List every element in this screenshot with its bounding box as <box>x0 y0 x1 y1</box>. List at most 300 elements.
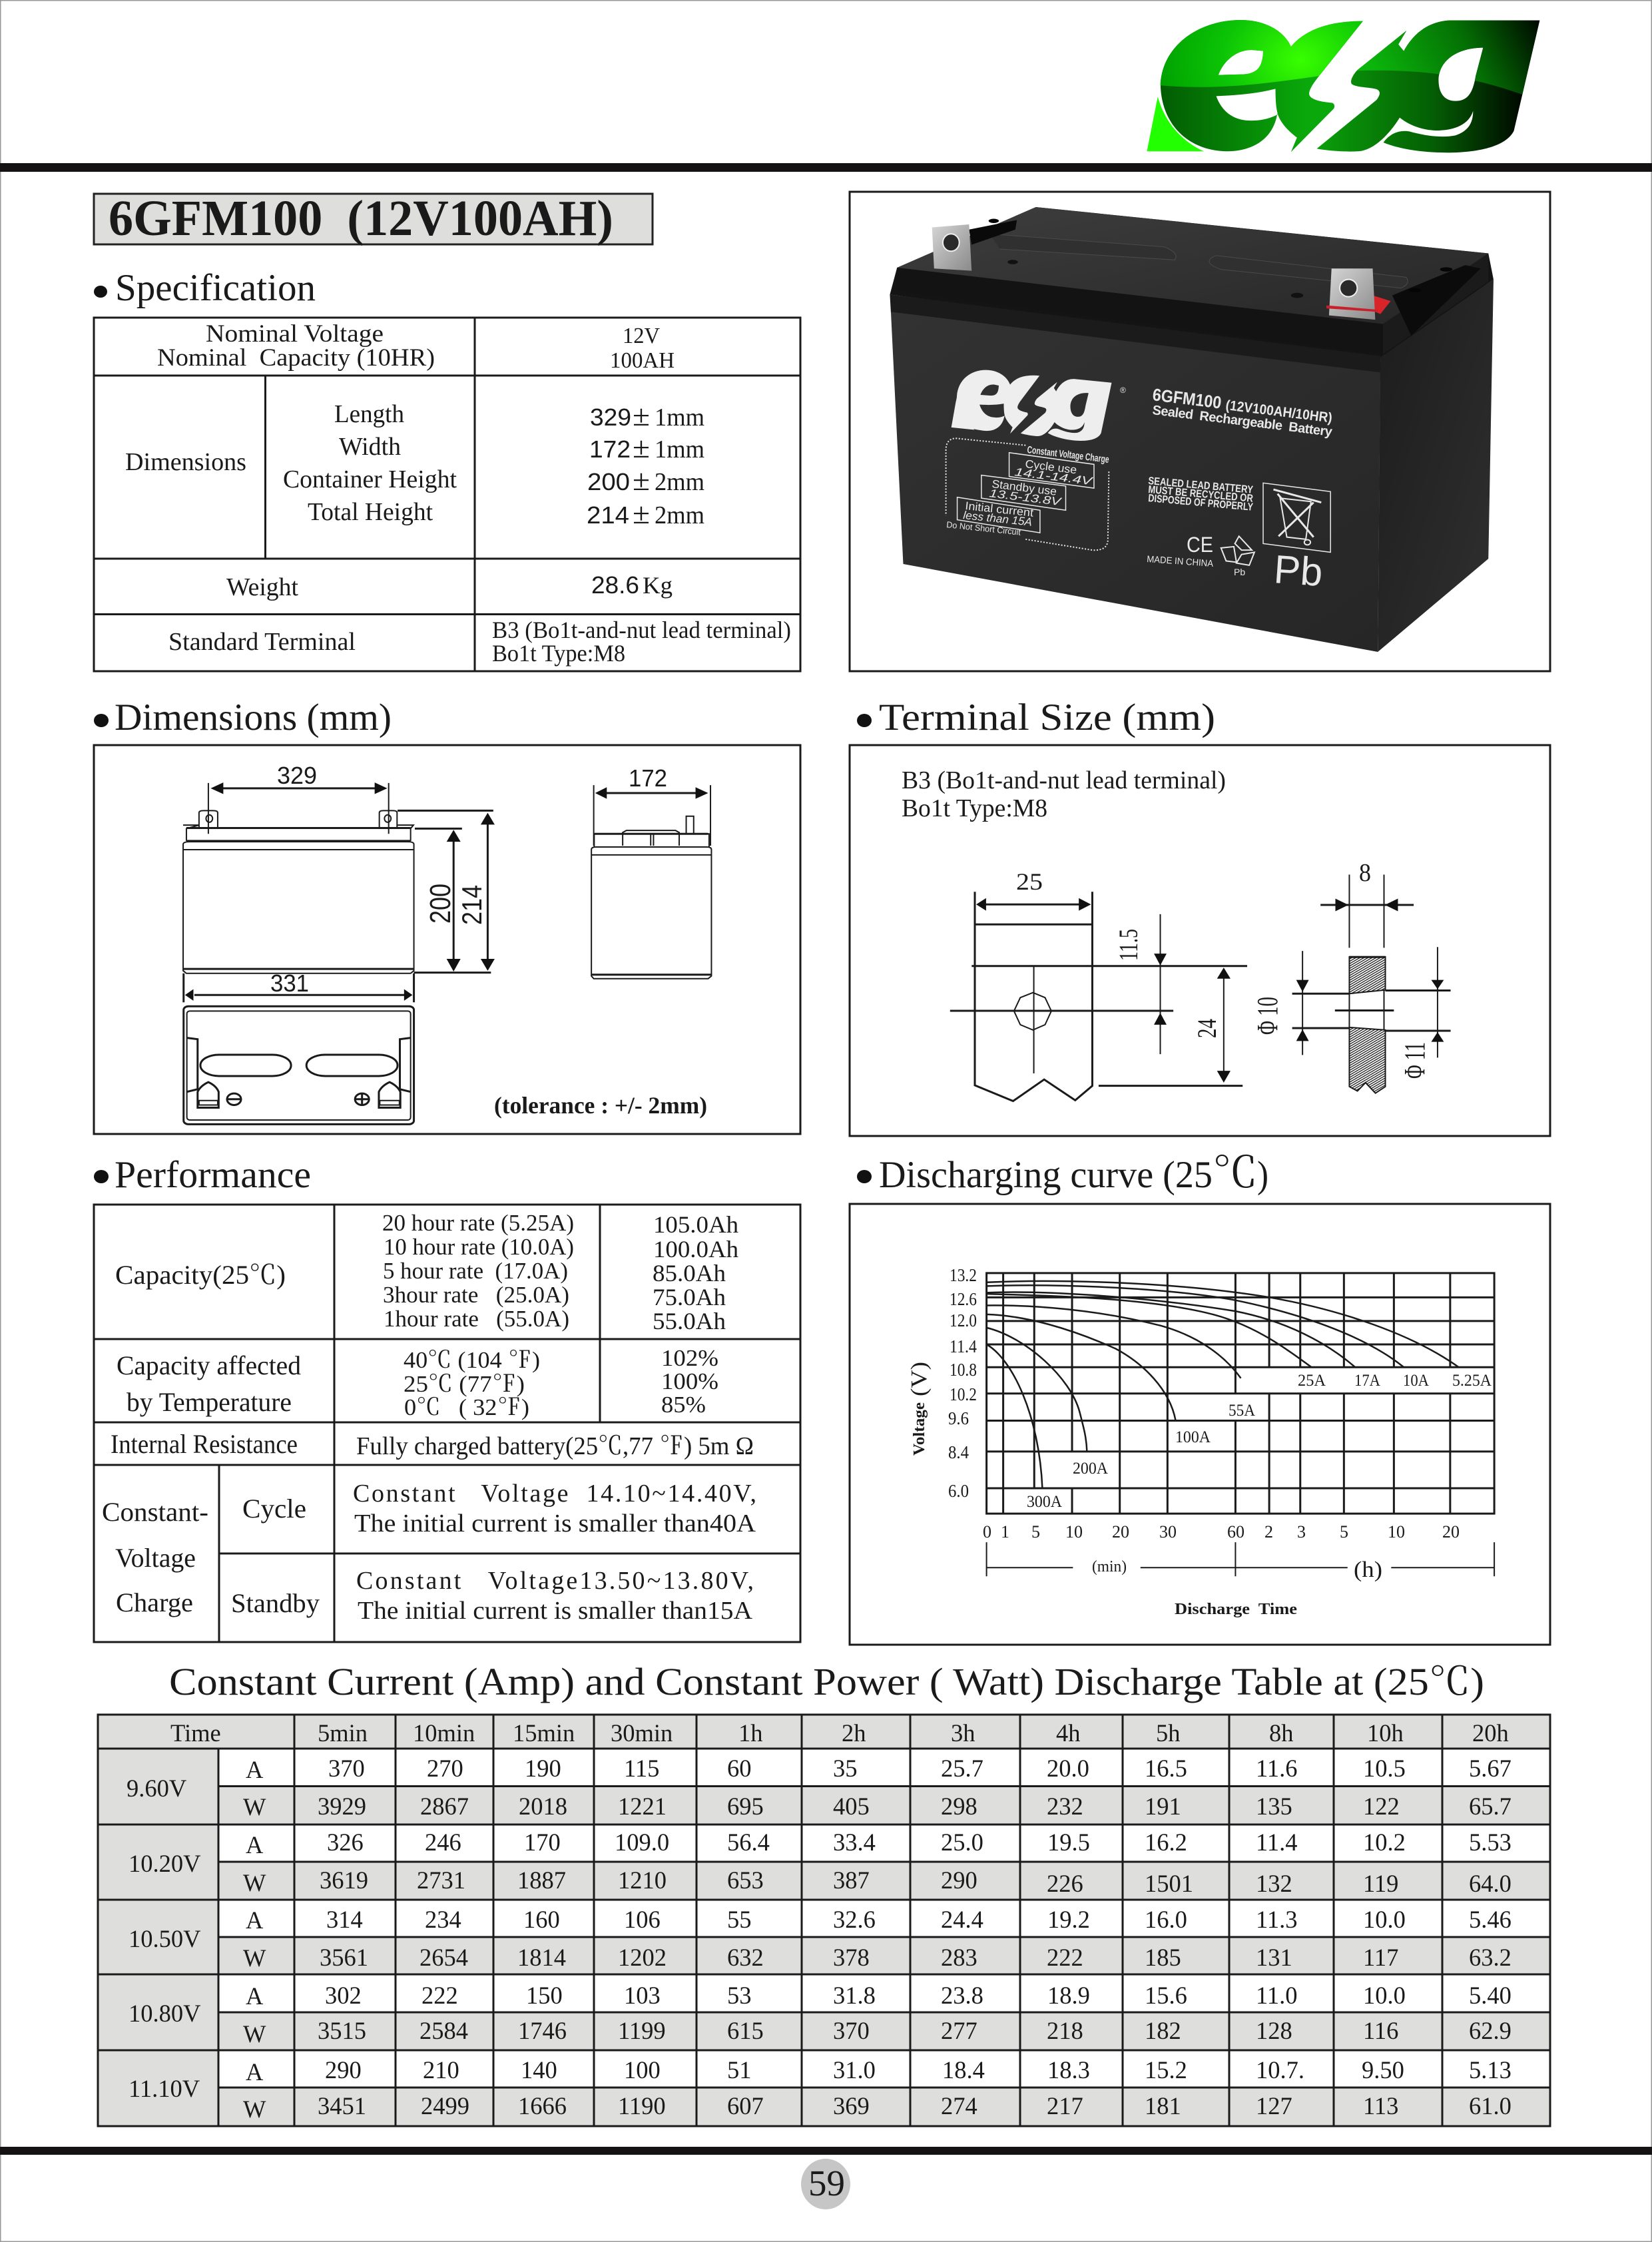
battery labels: DISPOSED OF PROPERLY <box>1148 493 1254 513</box>
panel: specification table: Total Height <box>308 498 433 526</box>
logo: esg <box>1147 20 1539 152</box>
row: 10.20V W: W <box>243 1869 266 1896</box>
page number: 59 <box>808 2163 845 2203</box>
row: 9.60V W: 695 <box>727 1793 764 1820</box>
x-axis scale <box>983 1522 1460 1541</box>
internal resistance row <box>111 1429 754 1460</box>
heading: Specification: Specification <box>115 267 316 309</box>
row: 10.20V A: 170 <box>524 1828 561 1856</box>
curve labels: 200A <box>1073 1460 1108 1478</box>
x-axis scale: 2 <box>1264 1522 1273 1541</box>
row: 10.20V W <box>243 1866 1512 1897</box>
temperature rows: 85% <box>661 1392 706 1418</box>
panel: specification table: Length <box>334 400 404 428</box>
row: 11.10V W: 181 <box>1145 2092 1181 2119</box>
battery labels: 13.5-13.8V <box>989 487 1063 508</box>
row: 10.20V A: 11.4 <box>1256 1828 1298 1856</box>
curve labels: 25A <box>1298 1372 1326 1390</box>
row: 10.80V W: 128 <box>1256 2017 1292 2044</box>
row: 11.10V W: 2499 <box>421 2092 469 2119</box>
row: 10.80V W: W <box>243 2020 266 2048</box>
row: 10.80V A: 11.0 <box>1256 1982 1298 2009</box>
panel: specification table: 329 <box>590 404 631 431</box>
row: 9.60V A: 16.5 <box>1145 1755 1187 1782</box>
row: 10.80V A: 31.8 <box>833 1982 876 2009</box>
row: 11.10V W: 607 <box>727 2092 764 2119</box>
row: 11.10V W: 1666 <box>518 2092 567 2119</box>
row: 10.80V A: 103 <box>624 1982 661 2009</box>
heading: Discharging curve: Discharging curve (25 <box>879 1154 1213 1196</box>
battery labels: Pb <box>1272 547 1324 595</box>
constant-voltage charge rows: Constant Voltage13.50~13.80V, <box>356 1567 754 1595</box>
panel: battery photo <box>850 192 1550 671</box>
table header row: 15min <box>513 1719 575 1747</box>
row: 10.50V A: 5.46 <box>1469 1906 1512 1933</box>
table header row: 20h <box>1472 1719 1509 1747</box>
internal resistance row: Fully charged battery(25℃,77 ℉) 5m Ω <box>356 1432 754 1460</box>
x-axis scale: 30 <box>1159 1522 1177 1541</box>
row: 9.60V A: 10.5 <box>1363 1755 1406 1782</box>
row: 9.60V W: W <box>243 1793 266 1821</box>
voltage labels: 11.10V <box>129 2075 200 2102</box>
capacity rows: Capacity(25℃) <box>115 1260 286 1290</box>
row: 10.80V A: 150 <box>526 1982 563 2009</box>
footer bar <box>0 2147 1652 2155</box>
drawing: terminal section <box>1292 875 1451 1093</box>
row: 9.60V A <box>246 1755 1512 1783</box>
dotted charge box <box>946 438 1109 550</box>
panel: specification table: Kg <box>643 572 673 599</box>
dimension labels: 172 <box>629 764 667 792</box>
row: 11.10V A: 210 <box>423 2056 459 2084</box>
row: 11.10V A <box>246 2056 1512 2086</box>
heading: Terminal Size: Terminal Size (mm) <box>879 697 1215 738</box>
x-axis scale: 1 <box>1001 1522 1009 1541</box>
table: constant current and power discharge <box>98 1715 1550 2126</box>
tolerance note: (tolerance : +/- 2mm) <box>494 1092 707 1119</box>
panel: specification table: 12V <box>623 324 660 348</box>
row: 10.80V W: 116 <box>1363 2017 1398 2044</box>
row: 10.50V A: 24.4 <box>941 1906 983 1933</box>
table header row <box>170 1719 1509 1747</box>
heading: Discharging curve: ℃ <box>1213 1149 1258 1197</box>
row: 10.20V W: 3619 <box>320 1866 368 1894</box>
temperature rows: by Temperature <box>127 1387 292 1417</box>
y-axis scale: 9.6 <box>948 1408 969 1428</box>
row: 10.50V A: 11.3 <box>1256 1906 1298 1933</box>
table header row: 2h <box>842 1719 866 1747</box>
x-axis units and title <box>1092 1557 1382 1618</box>
curve labels: 5.25A <box>1452 1372 1492 1390</box>
row: 10.80V A: 18.9 <box>1047 1982 1090 2009</box>
row: 9.60V W: 3929 <box>318 1793 366 1820</box>
panel: specification table: 1mm <box>655 404 704 431</box>
panel: specification table: 2mm <box>655 501 704 529</box>
header bar <box>0 163 1652 172</box>
table header row: 10min <box>413 1719 475 1747</box>
panel: specification table: Standard Terminal <box>168 628 356 656</box>
row: 11.10V A: 100 <box>624 2056 661 2084</box>
capacity rows <box>115 1210 738 1334</box>
row: 9.60V A: 270 <box>427 1755 463 1782</box>
row: 10.20V W: 290 <box>941 1866 977 1894</box>
row: 10.80V A <box>246 1982 1512 2010</box>
drawing: side view <box>591 785 711 979</box>
row: 10.80V W: 2584 <box>419 2017 468 2044</box>
row: 9.60V A: 20.0 <box>1047 1755 1089 1782</box>
drawing: terminal front <box>950 892 1247 1101</box>
row: 11.10V A: 5.13 <box>1469 2056 1512 2084</box>
row: 10.80V W: 182 <box>1145 2017 1181 2044</box>
row: 10.20V W: 2731 <box>417 1866 465 1894</box>
temperature rows <box>117 1345 718 1420</box>
x-axis scale: 3 <box>1297 1522 1306 1541</box>
battery labels: Initial current <box>965 499 1034 519</box>
row: 10.20V A: A <box>246 1831 264 1858</box>
battery labels: ® <box>1120 386 1126 395</box>
row: 10.20V A: 10.2 <box>1363 1828 1406 1856</box>
battery labels: Do Not Short Circuit <box>946 519 1021 537</box>
row: 11.10V A: 15.2 <box>1145 2056 1187 2084</box>
row: 10.50V W: 1814 <box>517 1944 566 1971</box>
terminal dimension labels: 25 <box>1016 868 1043 895</box>
y-axis scale: 8.4 <box>948 1442 969 1462</box>
panel: specification table: Width <box>339 433 401 461</box>
row: 9.60V W: 2018 <box>519 1793 567 1820</box>
mini logo on battery <box>952 366 1111 444</box>
row: 10.20V A: 326 <box>327 1828 364 1856</box>
row: 10.50V W <box>243 1944 1512 1972</box>
row: 10.50V A: 10.0 <box>1363 1906 1406 1933</box>
row: 11.10V A: 31.0 <box>833 2056 876 2084</box>
row: 9.60V A: 370 <box>328 1755 365 1782</box>
table header row: Time <box>170 1719 221 1747</box>
row: 10.80V W: 3515 <box>318 2017 366 2044</box>
battery labels: 6GFM100 <box>1151 384 1223 413</box>
x-axis scale: 20 <box>1112 1522 1129 1541</box>
row: 9.60V W: 298 <box>941 1793 977 1820</box>
row: 9.60V W: 191 <box>1145 1793 1181 1820</box>
row: 10.50V A: 106 <box>624 1906 661 1933</box>
capacity rows: 3hour rate (25.0A) <box>383 1282 569 1308</box>
panel: specification table: Nominal Capacity (10HR) <box>157 344 435 372</box>
voltage labels: 10.20V <box>129 1850 200 1877</box>
row: 10.80V A: 53 <box>727 1982 751 2009</box>
panel: terminal size drawing <box>850 745 1550 1136</box>
panel: specification table: Nominal Voltage <box>206 320 384 348</box>
row: 10.20V W: 1501 <box>1145 1870 1193 1897</box>
capacity rows: 100.0Ah <box>653 1236 738 1262</box>
row: 10.80V A: 10.0 <box>1363 1982 1406 2009</box>
capacity rows: 55.0Ah <box>653 1308 726 1334</box>
row: 10.20V W: 226 <box>1047 1870 1083 1897</box>
curve labels: 55A <box>1229 1402 1255 1420</box>
voltage labels: 10.50V <box>129 1925 200 1952</box>
constant-voltage charge rows: Constant Voltage 14.10~14.40V, <box>353 1480 756 1508</box>
row: 9.60V A: A <box>246 1756 264 1783</box>
curve labels: 300A <box>1027 1493 1062 1511</box>
dimension labels: 200 <box>424 884 457 924</box>
battery labels: Cycle use <box>1025 457 1077 476</box>
battery labels <box>946 384 1334 595</box>
panel: specification table: ± <box>633 431 650 464</box>
table header row: 4h <box>1056 1719 1080 1747</box>
table header row: 30min <box>611 1719 673 1747</box>
battery labels: (12V100AH/10HR) <box>1225 398 1333 426</box>
row: 9.60V W <box>243 1793 1512 1821</box>
battery body <box>890 207 1494 652</box>
internal resistance row: Internal Resistance <box>111 1429 298 1459</box>
row: 10.20V W: 64.0 <box>1469 1870 1512 1897</box>
terminal dimension labels: 8 <box>1359 859 1371 887</box>
row: 10.50V W: W <box>243 1944 266 1972</box>
capacity rows: 20 hour rate (5.25A) <box>382 1210 574 1236</box>
row: 11.10V A: 140 <box>521 2056 557 2084</box>
battery labels: less than 15A <box>963 509 1033 529</box>
row: 9.60V W: 2867 <box>420 1793 469 1820</box>
constant-voltage charge rows: The initial current is smaller than40A <box>354 1510 756 1538</box>
row: 11.10V A: 290 <box>325 2056 362 2084</box>
recycling bin icon <box>1263 483 1330 552</box>
row: 10.50V W: 117 <box>1363 1944 1398 1971</box>
temperature rows: 100% <box>661 1368 718 1394</box>
row: 9.60V A: 115 <box>624 1755 659 1782</box>
curve labels: 17A <box>1354 1372 1380 1390</box>
terminal dimension labels: 24 <box>1192 1019 1222 1038</box>
row: 10.50V W: 3561 <box>320 1944 368 1971</box>
battery labels: MADE IN CHINA <box>1147 553 1214 569</box>
row: 10.50V A: 234 <box>425 1906 461 1933</box>
battery labels: SEALED LEAD BATTERY <box>1148 475 1254 496</box>
row: 10.20V W: 1887 <box>517 1866 566 1894</box>
row: 9.60V A: 190 <box>525 1755 561 1782</box>
x-axis scale: 60 <box>1227 1522 1244 1541</box>
table header row: 1h <box>738 1719 763 1747</box>
row: 10.50V A: 19.2 <box>1047 1906 1090 1933</box>
row: 10.50V A: 55 <box>727 1906 751 1933</box>
drawing: front view <box>183 782 708 1002</box>
row: 10.20V A: 5.53 <box>1469 1828 1512 1856</box>
row: 10.20V A: 56.4 <box>727 1828 770 1856</box>
capacity rows: 5 hour rate (17.0A) <box>383 1258 568 1284</box>
curve labels: 100A <box>1175 1428 1211 1446</box>
chart grid and curves <box>987 1273 1494 1576</box>
battery labels: MUST BE RECYCLED OR <box>1148 484 1254 505</box>
voltage labels <box>127 1775 200 2102</box>
row: 11.10V W: W <box>243 2096 266 2123</box>
x-axis scale: 10 <box>1065 1522 1083 1541</box>
panel: specification table: ± <box>633 400 650 432</box>
table header row: 3h <box>951 1719 975 1747</box>
row: 11.10V A: 10.7. <box>1256 2056 1304 2084</box>
panel: terminal size drawing: B3 (Bo1t-and-nut lead terminal) <box>902 766 1226 794</box>
row: 10.50V A: A <box>246 1906 264 1934</box>
terminal dimension labels: Φ 10 <box>1251 997 1284 1035</box>
row: 10.80V A: 15.6 <box>1145 1982 1187 2009</box>
y-axis scale: 10.8 <box>950 1360 977 1380</box>
row: 11.10V A: 18.4 <box>942 2056 985 2084</box>
row: 10.50V A: 32.6 <box>833 1906 876 1933</box>
panel: discharging curve chart <box>850 1204 1550 1645</box>
voltage labels: 9.60V <box>127 1775 186 1802</box>
row: 10.20V A: 16.2 <box>1145 1828 1187 1856</box>
row: 10.80V A: 302 <box>325 1982 362 2009</box>
row: 9.60V A: 25.7 <box>941 1755 983 1782</box>
row: 11.10V A: 51 <box>727 2056 751 2084</box>
dimension labels: 329 <box>277 762 317 789</box>
row: 10.50V W: 283 <box>941 1944 977 1971</box>
x-axis scale: 10 <box>1388 1522 1405 1541</box>
panel: specification table: 1mm <box>655 435 704 463</box>
row: 10.20V W: 653 <box>727 1866 764 1894</box>
battery labels: Sealed Rechargeable Battery <box>1151 403 1334 439</box>
row: 11.10V W: 127 <box>1256 2092 1292 2119</box>
battery labels: Constant Voltage Charge <box>1027 444 1110 465</box>
curve labels: 10A <box>1403 1372 1429 1390</box>
row: 9.60V W: 65.7 <box>1469 1793 1512 1820</box>
y-axis title <box>907 1362 932 1456</box>
x-axis units and title: (min) <box>1092 1558 1127 1575</box>
row: 11.10V W: 61.0 <box>1469 2092 1512 2119</box>
drawing: top view <box>184 1006 414 1124</box>
panel: specification table: Container Height <box>283 465 457 493</box>
row: 10.50V W: 632 <box>727 1944 764 1971</box>
constant-voltage charge rows: The initial current is smaller than15A <box>358 1597 753 1625</box>
battery labels: Pb <box>1234 567 1245 577</box>
panel: specification table: 28.6 <box>591 571 639 599</box>
row: 11.10V W: 3451 <box>318 2092 366 2119</box>
row: 10.80V W: 615 <box>727 2017 764 2044</box>
row: 9.60V A: 60 <box>727 1755 751 1782</box>
row: 10.80V A: 5.40 <box>1469 1982 1512 2009</box>
row: 10.20V W: 119 <box>1363 1870 1398 1897</box>
table header row: 8h <box>1269 1719 1293 1747</box>
panel: specification table: 2mm <box>655 468 704 496</box>
y-axis scale: 12.0 <box>950 1310 977 1330</box>
row: 9.60V W: 405 <box>833 1793 870 1820</box>
row: 11.10V A: A <box>246 2058 264 2086</box>
x-axis scale: 5 <box>1340 1522 1348 1541</box>
row: 10.50V W: 1202 <box>618 1944 667 1971</box>
battery labels: Standby use <box>991 477 1057 498</box>
row: 10.50V A: 314 <box>326 1906 363 1933</box>
row: 10.50V W: 131 <box>1256 1944 1292 1971</box>
row: 10.20V W: 387 <box>833 1866 870 1894</box>
x-axis units and title: Discharge Time <box>1175 1601 1297 1618</box>
dimension labels <box>270 762 667 997</box>
temperature rows: 102% <box>661 1345 718 1371</box>
row: 10.80V W: 218 <box>1047 2017 1083 2044</box>
battery labels: CE <box>1187 533 1213 557</box>
panel: performance table <box>94 1205 800 1642</box>
y-axis scale: 10.2 <box>950 1384 977 1404</box>
curve labels <box>1027 1372 1492 1511</box>
row: 10.50V A <box>246 1906 1512 1934</box>
row: 11.10V A: 18.3 <box>1047 2056 1090 2084</box>
row: 10.80V A: A <box>246 1982 264 2010</box>
constant-voltage charge rows: Standby <box>231 1588 320 1618</box>
panel: specification table: 200 <box>587 468 630 495</box>
table header row: 5min <box>318 1719 368 1747</box>
x-axis scale: 20 <box>1442 1522 1460 1541</box>
y-axis scale: 11.4 <box>950 1336 977 1356</box>
panel: specification table: ± <box>633 464 650 497</box>
row: 11.10V W: 369 <box>833 2092 870 2119</box>
panel: specification table: 214 <box>587 501 629 529</box>
dimension labels: 214 <box>456 885 487 925</box>
row: 10.20V A: 109.0 <box>615 1828 669 1856</box>
temperature rows: 40℃ (104 ℉) <box>404 1347 540 1373</box>
row: 10.20V A: 246 <box>425 1828 461 1856</box>
row: 10.80V W: 1746 <box>518 2017 567 2044</box>
x-axis scale: 5 <box>1031 1522 1040 1541</box>
row: 11.10V A: 9.50 <box>1362 2056 1404 2084</box>
row: 10.20V W: 1210 <box>618 1866 667 1894</box>
row: 11.10V W: 274 <box>941 2092 977 2119</box>
heading: Performance: Performance <box>115 1154 311 1196</box>
row: 10.20V A <box>246 1828 1512 1858</box>
capacity rows: 105.0Ah <box>653 1211 738 1238</box>
panel: specification table: 100AH <box>610 348 675 373</box>
x-axis scale: 0 <box>983 1522 991 1541</box>
y-axis scale: 6.0 <box>948 1481 969 1501</box>
capacity rows: 1hour rate (55.0A) <box>384 1306 569 1332</box>
panel: specification table: B3 (Bo1t-and-nut lead terminal) <box>492 617 791 643</box>
row: 9.60V A: 5.67 <box>1469 1755 1512 1782</box>
battery labels: 14.1-14.4V <box>1014 465 1094 488</box>
row: 9.60V W: 232 <box>1047 1793 1083 1820</box>
row: 11.10V W <box>243 2092 1512 2123</box>
row: 10.50V W: 2654 <box>419 1944 468 1971</box>
constant-voltage charge rows: Cycle <box>242 1494 306 1524</box>
panel: dimensions drawing <box>94 745 800 1134</box>
terminal dimension labels: 11.5 <box>1113 929 1143 961</box>
charge label boxes <box>958 453 1094 533</box>
panel: specification table: 172 <box>589 435 631 463</box>
heading: discharge table title: Constant Current (Amp) and Constant Power ( Watt) Discharge Table at (25℃) <box>169 1660 1484 1703</box>
table header row: 10h <box>1367 1719 1404 1747</box>
terminal dimension labels <box>1016 859 1431 1079</box>
recycle symbol <box>1221 536 1254 565</box>
page number <box>801 2159 850 2209</box>
row: 10.50V A: 16.0 <box>1145 1906 1187 1933</box>
row: 10.80V W: 62.9 <box>1469 2017 1512 2044</box>
row: 10.80V W: 277 <box>941 2017 977 2044</box>
row: 10.80V W: 370 <box>833 2017 870 2044</box>
row: 10.20V W: 132 <box>1256 1870 1292 1897</box>
heading: Dimensions: Dimensions (mm) <box>115 697 392 738</box>
temperature rows: 25℃ (77℉) <box>404 1371 525 1397</box>
constant-voltage charge rows: Voltage <box>115 1543 196 1573</box>
row: 10.80V W: 1199 <box>618 2017 666 2044</box>
row: 10.50V W: 222 <box>1047 1944 1083 1971</box>
row: 9.60V W: 135 <box>1256 1793 1292 1820</box>
x-axis units and title: (h) <box>1354 1557 1382 1582</box>
row: 10.50V W: 378 <box>833 1944 870 1971</box>
row: 10.80V W <box>243 2017 1512 2048</box>
heading: Discharging curve: ) <box>1257 1154 1268 1196</box>
capacity rows: 10 hour rate (10.0A) <box>384 1234 574 1260</box>
temperature rows: 0℃ ( 32℉) <box>404 1394 529 1420</box>
row: 10.20V A: 25.0 <box>941 1828 983 1856</box>
row: 10.20V A: 33.4 <box>833 1828 876 1856</box>
panel: specification table <box>94 318 800 671</box>
capacity rows: 85.0Ah <box>653 1260 726 1286</box>
title: model: 6GFM100 (12V100AH) <box>109 190 613 246</box>
row: 11.10V W: 1190 <box>618 2092 666 2119</box>
terminal dimension labels: Φ 11 <box>1398 1042 1431 1079</box>
row: 11.10V W: 113 <box>1363 2092 1398 2119</box>
